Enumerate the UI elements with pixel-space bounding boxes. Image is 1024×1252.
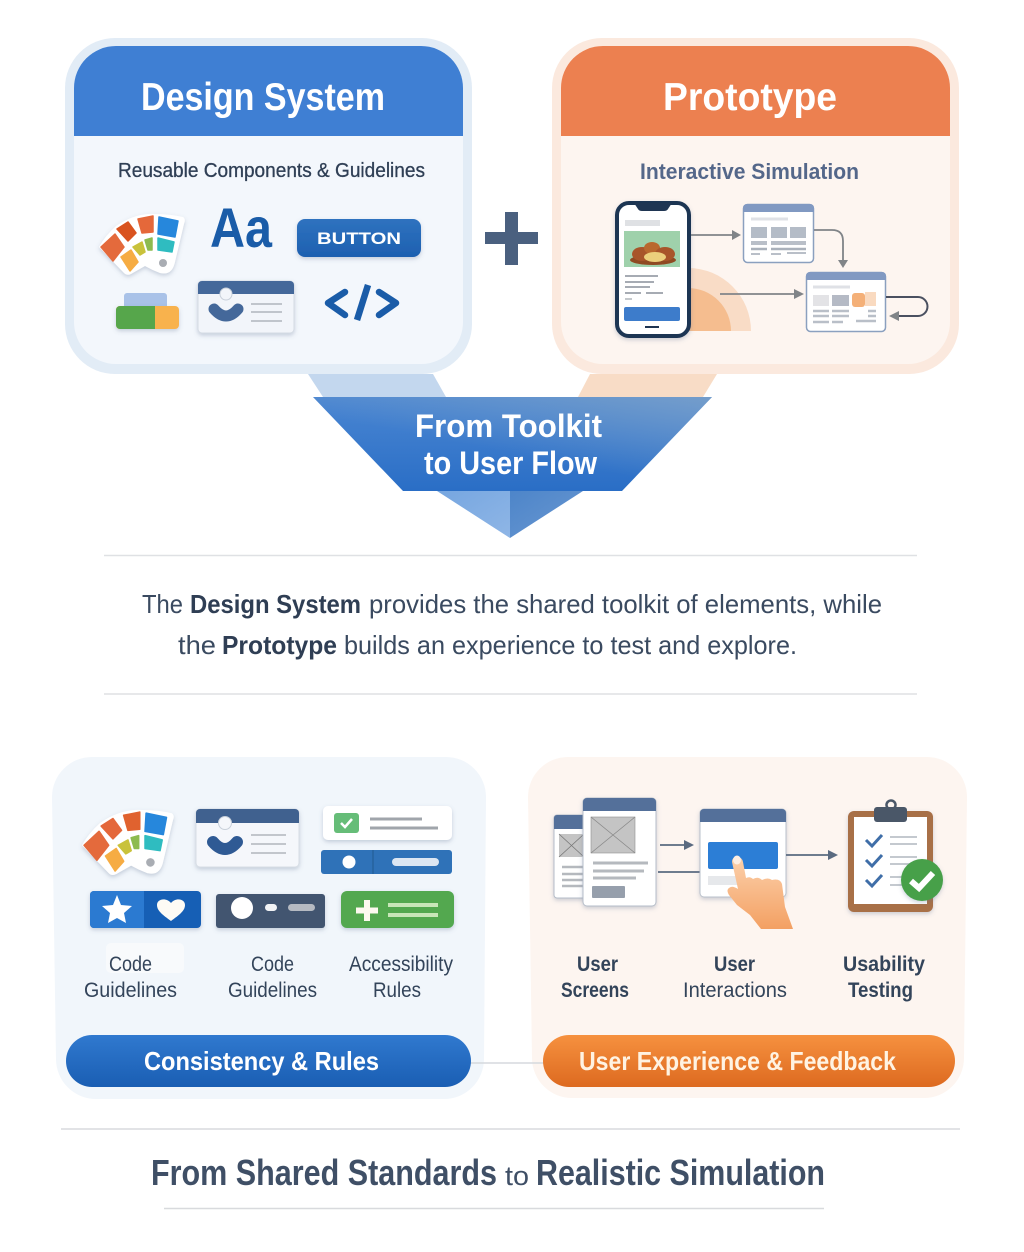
merge banner arrow (313, 397, 712, 538)
panel: consistency and rules (52, 757, 486, 1099)
icon: typography Aa: Aa (210, 196, 273, 259)
closing headline: to (505, 1161, 529, 1191)
icon: dark slider (216, 894, 325, 928)
connector: orange band (578, 374, 717, 397)
label: accessibility rules: Rules (373, 979, 421, 1002)
icon: button (297, 219, 421, 257)
label: user interactions (683, 953, 787, 1002)
label: code guidelines two (228, 953, 317, 1002)
arrow: screens to interactions (658, 840, 700, 872)
connector between pills (468, 1062, 546, 1064)
banner text: From Toolkit (415, 408, 602, 444)
plus sign (485, 212, 538, 265)
label: usability testing: Usability (843, 953, 925, 976)
screen two (806, 272, 886, 332)
pill: consistency and rules: Consistency & Rules (144, 1046, 379, 1076)
closing headline: From Shared Standards (151, 1152, 497, 1193)
summary paragraph: builds an experience to test and explore. (344, 630, 797, 660)
icon: user screens (554, 798, 656, 906)
panel: prototype (552, 38, 959, 374)
label: code guidelines one: Code (109, 953, 152, 976)
icon: layered blocks (116, 293, 179, 329)
summary paragraph (142, 589, 882, 660)
icon: UI card (196, 809, 299, 867)
banner text: to User Flow (424, 445, 597, 481)
label: user screens (561, 953, 629, 1002)
icon: toggle bar (321, 850, 452, 874)
label: code guidelines one (84, 953, 177, 1002)
pill: user experience and feedback: User Experience & Feedback (579, 1046, 896, 1076)
summary paragraph: the (178, 630, 216, 660)
arrow: interactions to testing (786, 850, 838, 860)
prototype subtitle: Interactive Simulation (640, 159, 859, 184)
label: usability testing: Testing (848, 979, 913, 1002)
closing headline: Realistic Simulation (536, 1152, 825, 1193)
prototype header (561, 46, 950, 136)
icon: green add bar (341, 891, 454, 928)
banner text (415, 408, 602, 481)
label: usability testing (843, 953, 925, 1002)
icon: UI card (198, 281, 294, 333)
label: user screens: User (577, 953, 618, 976)
prototype header: Prototype (663, 76, 837, 119)
icon: checkbox card (323, 806, 452, 840)
connector: blue band (308, 374, 446, 397)
flow arrows (691, 230, 927, 321)
pill: user experience and feedback (543, 1035, 955, 1087)
label: code guidelines two: Code (251, 953, 294, 976)
design system subtitle: Reusable Components & Guidelines (118, 160, 425, 182)
icon: tapped screen (700, 809, 793, 929)
summary paragraph: Prototype (222, 630, 337, 660)
icon: button: BUTTON (317, 229, 401, 248)
label: user interactions: Interactions (683, 979, 787, 1002)
panel: design system (65, 38, 472, 374)
pill: consistency and rules (66, 1035, 471, 1087)
summary paragraph: The (142, 589, 183, 619)
icon: colour palette (82, 810, 174, 875)
icon: colour palette (99, 214, 185, 275)
design system header (74, 46, 463, 136)
label: code guidelines two: Guidelines (228, 979, 317, 1002)
label: user interactions: User (714, 953, 755, 976)
icon: code brackets (328, 285, 396, 320)
panel: user experience and feedback (528, 757, 967, 1098)
summary paragraph: provides the shared toolkit of elements, while (369, 589, 882, 619)
label: user screens: Screens (561, 979, 629, 1002)
icon: hand pointer (728, 856, 793, 929)
label smudge (106, 943, 184, 973)
closing headline (151, 1152, 825, 1193)
design system header: Design System (141, 76, 385, 119)
label: accessibility rules (349, 953, 453, 1002)
decorative semicircle (688, 268, 751, 331)
icon: clipboard with check (848, 800, 943, 912)
screen one (743, 204, 814, 262)
summary paragraph: Design System (190, 589, 361, 619)
phone mockup (617, 203, 689, 336)
label: accessibility rules: Accessibility (349, 953, 453, 976)
icon: star and heart (90, 891, 201, 928)
label: code guidelines one: Guidelines (84, 979, 177, 1002)
